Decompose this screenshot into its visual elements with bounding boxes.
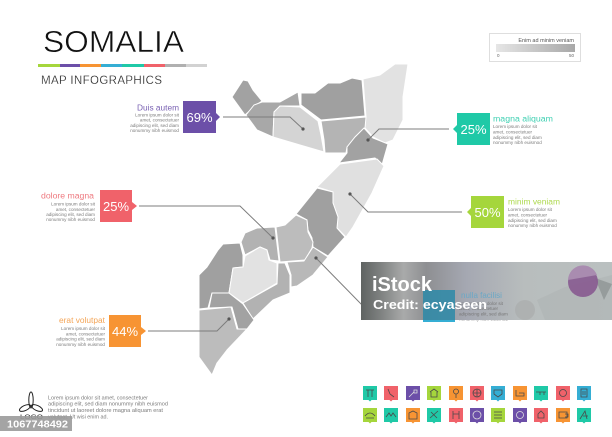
region: Bay <box>229 247 277 303</box>
region: Bakool <box>241 227 279 261</box>
callout: red 25%: adipiscing elit, sed diam <box>46 212 95 217</box>
region: Mudug <box>317 159 384 237</box>
title: SOMALIA <box>43 25 185 59</box>
logo: LOGO <box>20 414 43 421</box>
map: Somalia regions <box>199 64 408 375</box>
stock watermark banner: Lorem ipsum dolor sit <box>459 301 504 306</box>
callout: teal 25%: adipiscing elit, sed diam <box>493 135 542 140</box>
region: Nugaal <box>339 128 388 165</box>
logo <box>19 392 43 421</box>
callout: red 25%: dolore magna <box>41 192 95 200</box>
region: Galgaduud <box>296 188 345 256</box>
callout: teal 25%: nonummy nibh euismod <box>493 140 542 145</box>
callout: red 25% <box>41 190 275 240</box>
legend: 50 <box>569 53 575 58</box>
region: Lower Shabelle <box>243 263 290 319</box>
callout: purple 69%: amet, consectetuer <box>140 118 179 122</box>
icon grid <box>363 386 591 424</box>
callout: purple 69%: Lorem ipsum dolor sit <box>135 112 180 118</box>
callout: blue, behind watermark <box>314 256 508 322</box>
callout: blue, behind watermark: nonummy nibh euismod <box>459 316 508 322</box>
footer text: volutpat. Ut wisi enim ad. <box>48 414 108 420</box>
subtitle: MAP INFOGRAPHICS <box>41 75 162 87</box>
region: Middle Juba <box>209 293 254 329</box>
region: Bari <box>363 64 408 143</box>
colour strip <box>38 64 207 67</box>
callout: teal 25%: Lorem ipsum dolor sit <box>493 124 538 129</box>
callout: orange 44%: adipiscing elit, sed diam <box>56 336 105 342</box>
stock watermark banner: iStock <box>372 274 433 296</box>
legend: 0 <box>497 53 500 58</box>
callout: orange 44%: nonummy nibh euismod <box>56 342 105 347</box>
footer text: tincidunt ut laoreet dolore magna aliquam erat <box>48 408 164 414</box>
image id badge: 1067748492 <box>7 418 68 430</box>
callout: lime 50%: minim veniam <box>508 198 560 206</box>
callout: lime 50%: amet, consectetuer <box>508 212 548 218</box>
stock watermark banner: adipiscing elit, sed diam <box>459 312 508 316</box>
callout: orange 44% <box>56 315 231 347</box>
callout: purple 69% <box>130 101 305 133</box>
stock watermark banner: amet, consectetuer <box>459 306 499 311</box>
region: Woqooyi Galbeed <box>246 92 300 137</box>
callout: orange 44%: amet, consectetuer <box>66 331 105 336</box>
region: Sool <box>321 117 366 153</box>
callout: orange 44%: 44% <box>112 324 138 339</box>
footer text: adipiscing elit, sed diam nonummy nibh euismod <box>48 402 168 408</box>
region: Togdheer <box>273 106 324 152</box>
callout: orange 44%: Lorem ipsum dolor sit <box>61 326 106 331</box>
callout: lime 50%: nonummy nibh euismod <box>508 223 557 228</box>
callout: purple 69%: adipiscing elit, sed diam <box>130 123 179 128</box>
callout: red 25%: Lorem ipsum dolor sit <box>51 202 96 206</box>
callout: lime 50%: Lorem ipsum dolor sit <box>508 207 553 212</box>
icon row 1 <box>363 386 591 402</box>
legend: Enim ad minim veniam <box>518 38 574 44</box>
stock watermark banner: Credit: ecyaseen <box>373 298 487 312</box>
region: Sanaag <box>301 78 365 120</box>
stock watermark banner: nulla facilisi <box>461 291 502 300</box>
callout: lime 50% <box>348 192 560 228</box>
callout: red 25%: amet, consectetuer <box>56 207 95 212</box>
callout: purple 69%: nonummy nibh euismod <box>130 128 179 133</box>
region: Middle Shabelle <box>287 247 328 287</box>
callout: red 25%: 25% <box>103 199 129 214</box>
callout: purple 69%: Duis autem <box>137 104 179 112</box>
callout: orange 44%: erat volutpat <box>59 316 106 325</box>
callout: red 25%: nonummy nibh euismod <box>46 217 95 222</box>
stock watermark banner <box>361 262 612 320</box>
footer text <box>48 396 168 420</box>
callout: purple 69%: 69% <box>186 110 213 125</box>
region: Awdal <box>232 80 262 115</box>
legend <box>490 34 580 62</box>
region: Gedo <box>199 243 243 309</box>
callout: lime 50%: adipiscing elit, sed diam <box>508 218 557 223</box>
callout: teal 25%: 25% <box>460 122 487 137</box>
callout: teal 25%: magna aliquam <box>493 114 553 124</box>
callout: teal 25%: amet, consectetuer <box>493 130 533 134</box>
region: Hiiraan <box>276 215 313 262</box>
region: Lower Juba <box>199 307 247 375</box>
footer text: Lorem ipsum dolor sit amet, consectetuer <box>48 396 148 402</box>
icon row 2 <box>363 408 591 424</box>
callout: lime 50%: 50% <box>474 205 501 220</box>
image id badge <box>0 416 72 431</box>
callout: teal 25% <box>366 113 553 145</box>
